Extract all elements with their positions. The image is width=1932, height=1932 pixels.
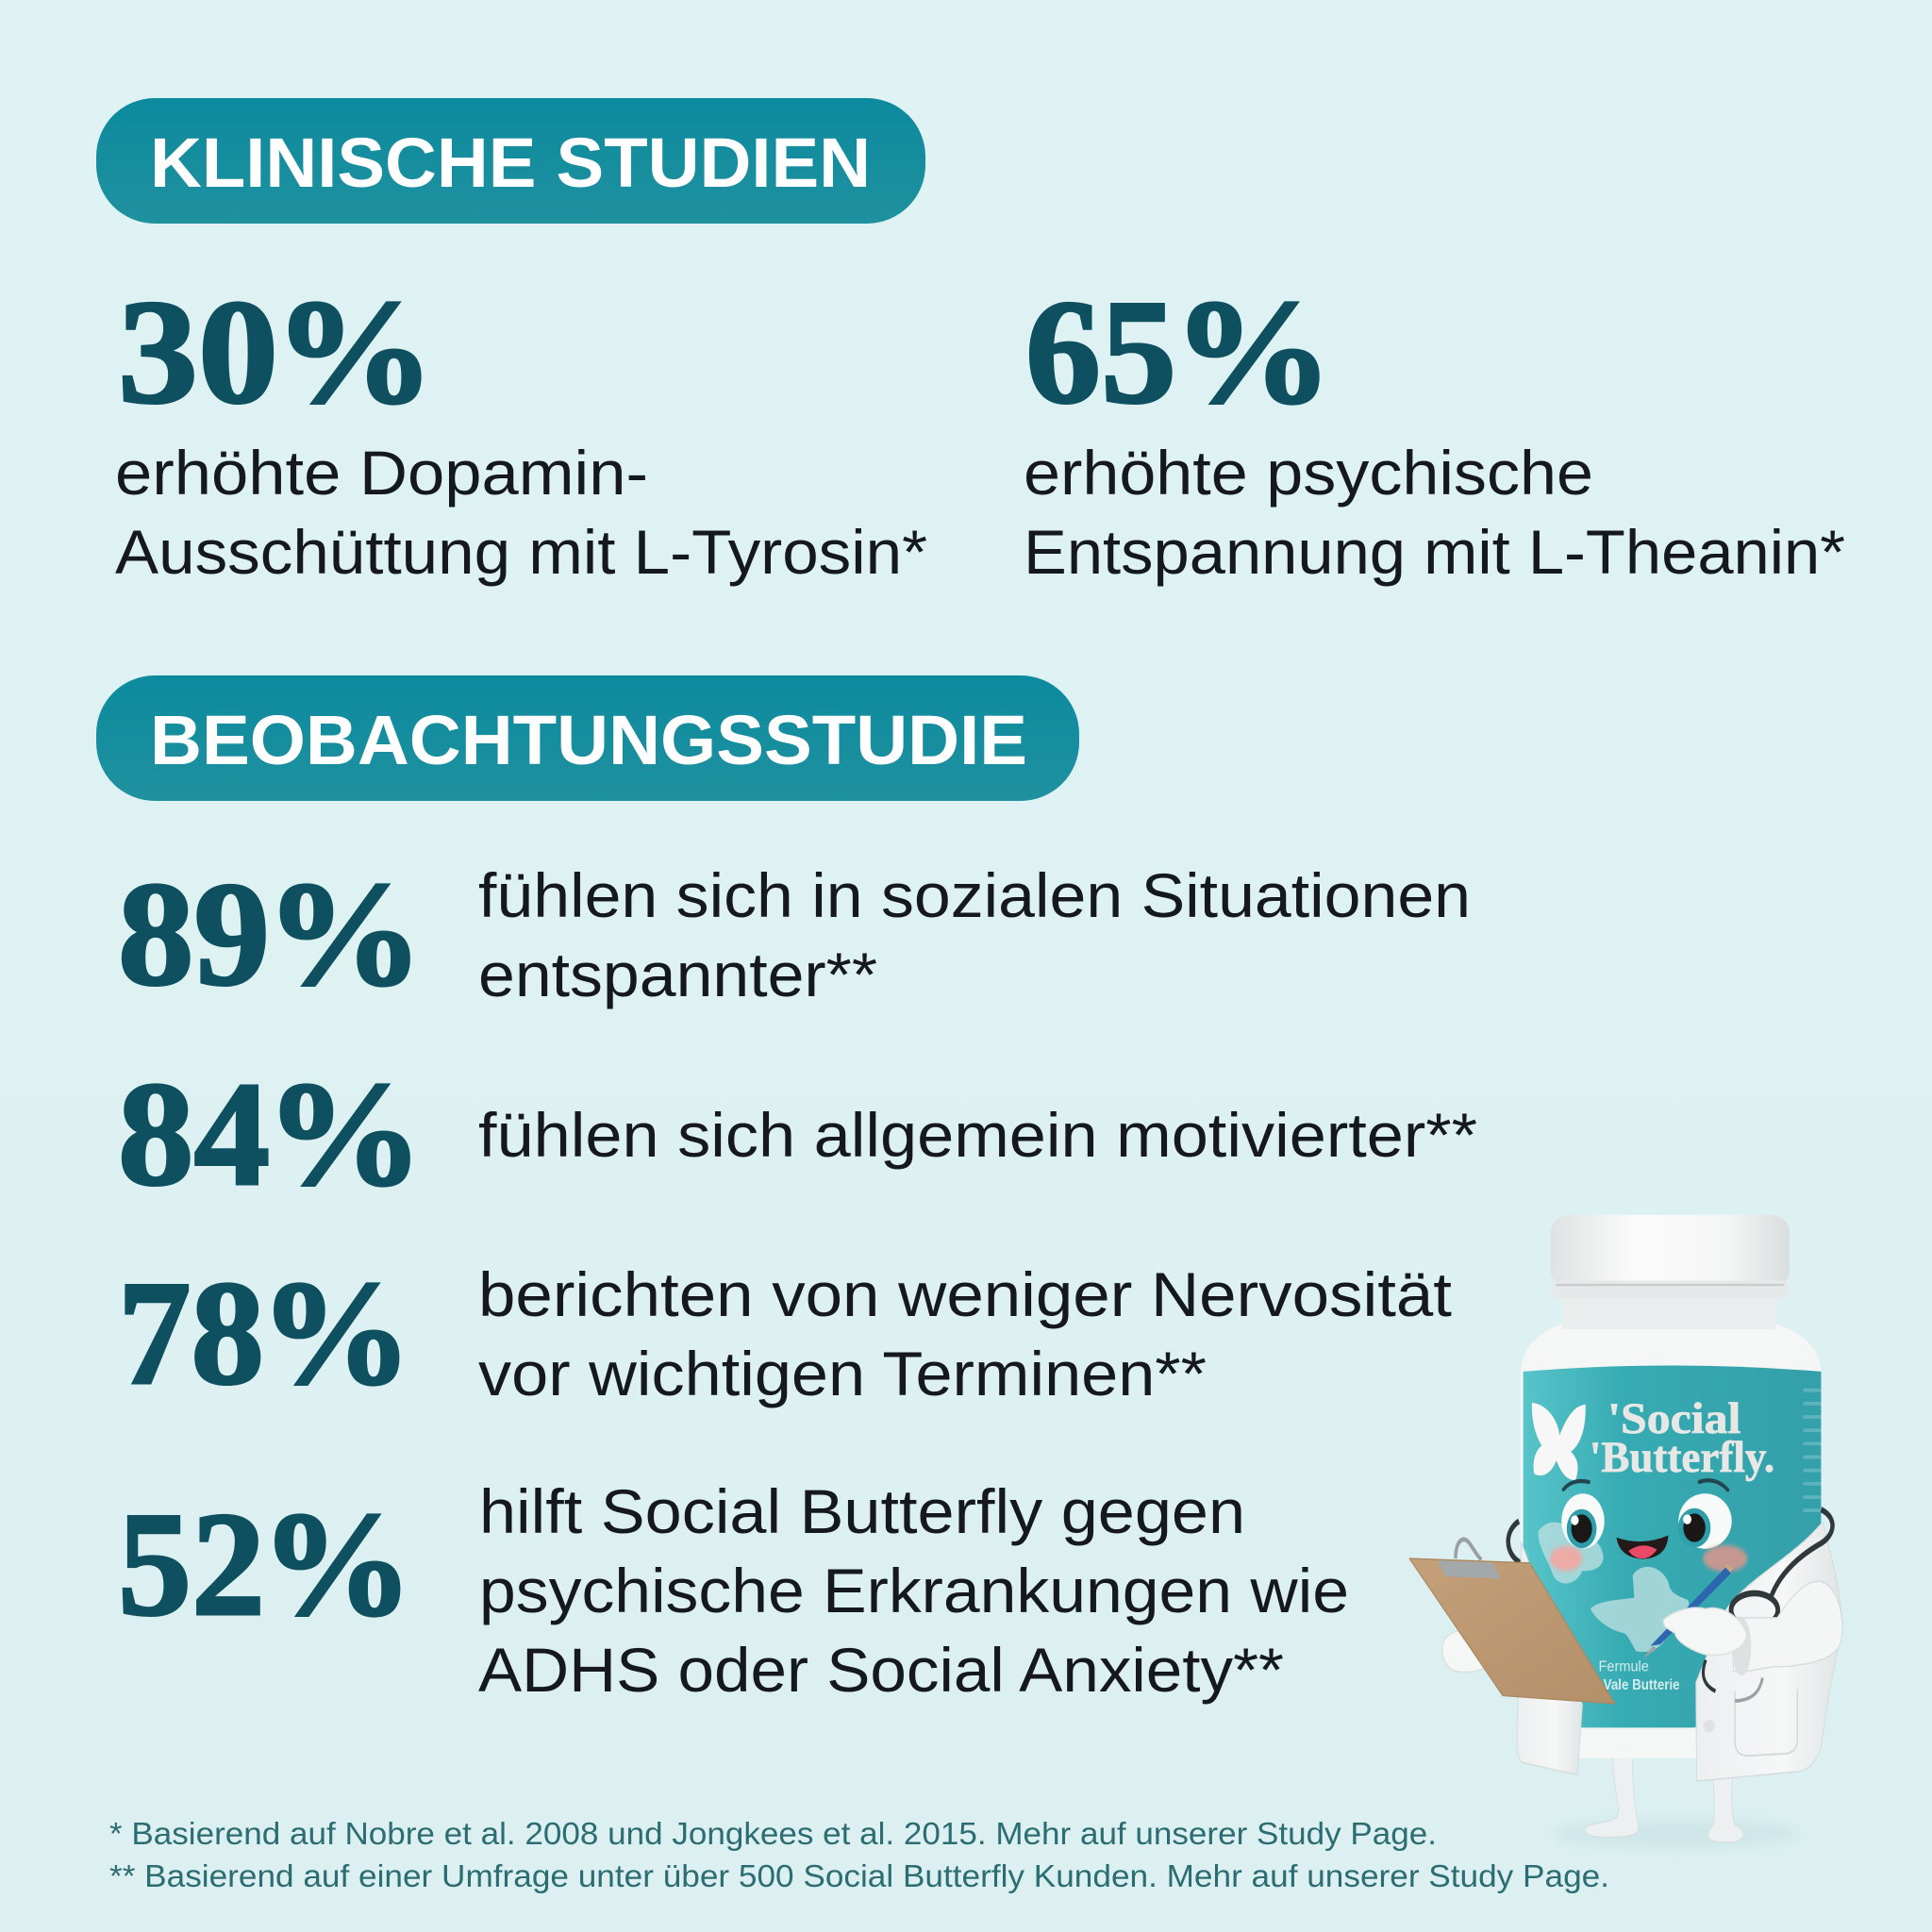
stat row: 89%: entspannter** xyxy=(478,940,877,1009)
section badge: Klinische Studien xyxy=(96,98,925,224)
stat row: 84%: 84 xyxy=(118,1052,270,1217)
label: small text xyxy=(1599,1657,1680,1692)
stat row: 89%: fühlen sich in sozialen Situationen xyxy=(478,860,1471,930)
stat: 65% relaxation: % xyxy=(1173,270,1333,435)
coat sleeve xyxy=(1732,1581,1842,1675)
bottle body xyxy=(1521,1324,1821,1758)
stat row: 84%: % xyxy=(265,1052,424,1217)
stethoscope xyxy=(1703,1509,1833,1701)
stat row: 52%: psychische Erkrankungen wie xyxy=(479,1556,1349,1625)
stat: 65% relaxation: 65 xyxy=(1025,270,1176,435)
bottle neck xyxy=(1563,1296,1775,1329)
lab coat left panel xyxy=(1517,1542,1582,1774)
label: pale butterfly shapes xyxy=(1539,1523,1689,1652)
stat: 65% relaxation xyxy=(1024,270,1845,587)
stat row: 52%: % xyxy=(260,1482,413,1647)
label: brand name: 'Social xyxy=(1607,1394,1740,1442)
clipboard xyxy=(1409,1540,1615,1704)
face: eyebrows xyxy=(1563,1480,1728,1490)
bottle label xyxy=(1524,1366,1821,1727)
stat row: 89% xyxy=(118,852,1471,1017)
stat: 30% dopamine: % xyxy=(274,270,435,435)
stat row: 78%: vor wichtigen Terminen** xyxy=(478,1339,1207,1408)
stat row: 52%: hilft Social Butterfly gegen xyxy=(479,1476,1245,1546)
stat row: 89%: % xyxy=(265,852,424,1017)
stat row: 52% xyxy=(118,1476,1349,1705)
face: cheeks xyxy=(1550,1545,1747,1572)
label: brand name xyxy=(1590,1394,1774,1481)
footnotes xyxy=(109,1816,1609,1893)
stat row: 52%: 52 xyxy=(118,1482,265,1647)
stat: 65% relaxation: erhöhte psychische xyxy=(1024,438,1593,508)
section badge: Beobachtungsstudie xyxy=(96,675,1079,801)
stethoscope left tube xyxy=(1508,1521,1521,1563)
label: small text: Vale Butterie xyxy=(1604,1675,1680,1692)
stat row: 78%: berichten von weniger Nervosität xyxy=(478,1259,1452,1329)
stat row: 78%: 78 xyxy=(118,1251,264,1416)
face: right eye xyxy=(1678,1493,1732,1549)
face: left eye xyxy=(1561,1493,1605,1549)
stat row: 84%: fühlen sich allgemein motivierter** xyxy=(478,1100,1477,1170)
stat: 65% relaxation: Entspannung mit L-Theanin* xyxy=(1024,517,1845,587)
stat row: 84% xyxy=(118,1052,1477,1217)
stat: 30% dopamine: 30 xyxy=(118,270,278,435)
mascot: supplement bottle dressed as a doctor xyxy=(1409,1215,1842,1849)
stat row: 78%: % xyxy=(259,1251,412,1416)
footnotes: * Basierend auf Nobre et al. 2008 und Jongkees et al. 2015. Mehr auf unserer Study Page. xyxy=(109,1816,1437,1851)
right hand holding pen xyxy=(1663,1607,1746,1656)
stat: 30% dopamine: erhöhte Dopamin- xyxy=(115,438,648,508)
lab coat right panel xyxy=(1696,1522,1842,1781)
footnotes: ** Basierend auf einer Umfrage unter über 500 Social Butterfly Kunden. Mehr auf unserer Study Page. xyxy=(109,1858,1609,1893)
bottle cap xyxy=(1551,1215,1790,1298)
left hand xyxy=(1442,1629,1496,1673)
section badge: Beobachtungsstudie: BEOBACHTUNGSSTUDIE xyxy=(150,701,1027,779)
face: smiling mouth xyxy=(1616,1536,1669,1559)
label: butterfly logo xyxy=(1532,1403,1586,1480)
stat row: 78% xyxy=(118,1251,1452,1416)
stat row: 52%: ADHS oder Social Anxiety** xyxy=(478,1635,1284,1705)
stat: 30% dopamine xyxy=(115,270,927,587)
label: small text: Fermule xyxy=(1599,1657,1649,1674)
stat: 30% dopamine: Ausschüttung mit L-Tyrosin* xyxy=(115,517,927,587)
pen xyxy=(1642,1563,1733,1659)
label: brand name: 'Butterfly. xyxy=(1590,1433,1774,1481)
section badge: Klinische Studien: KLINISCHE STUDIEN xyxy=(150,124,871,202)
stat row: 89%: 89 xyxy=(118,852,270,1017)
ground shadow xyxy=(1553,1819,1800,1849)
legs and feet xyxy=(1585,1754,1743,1842)
